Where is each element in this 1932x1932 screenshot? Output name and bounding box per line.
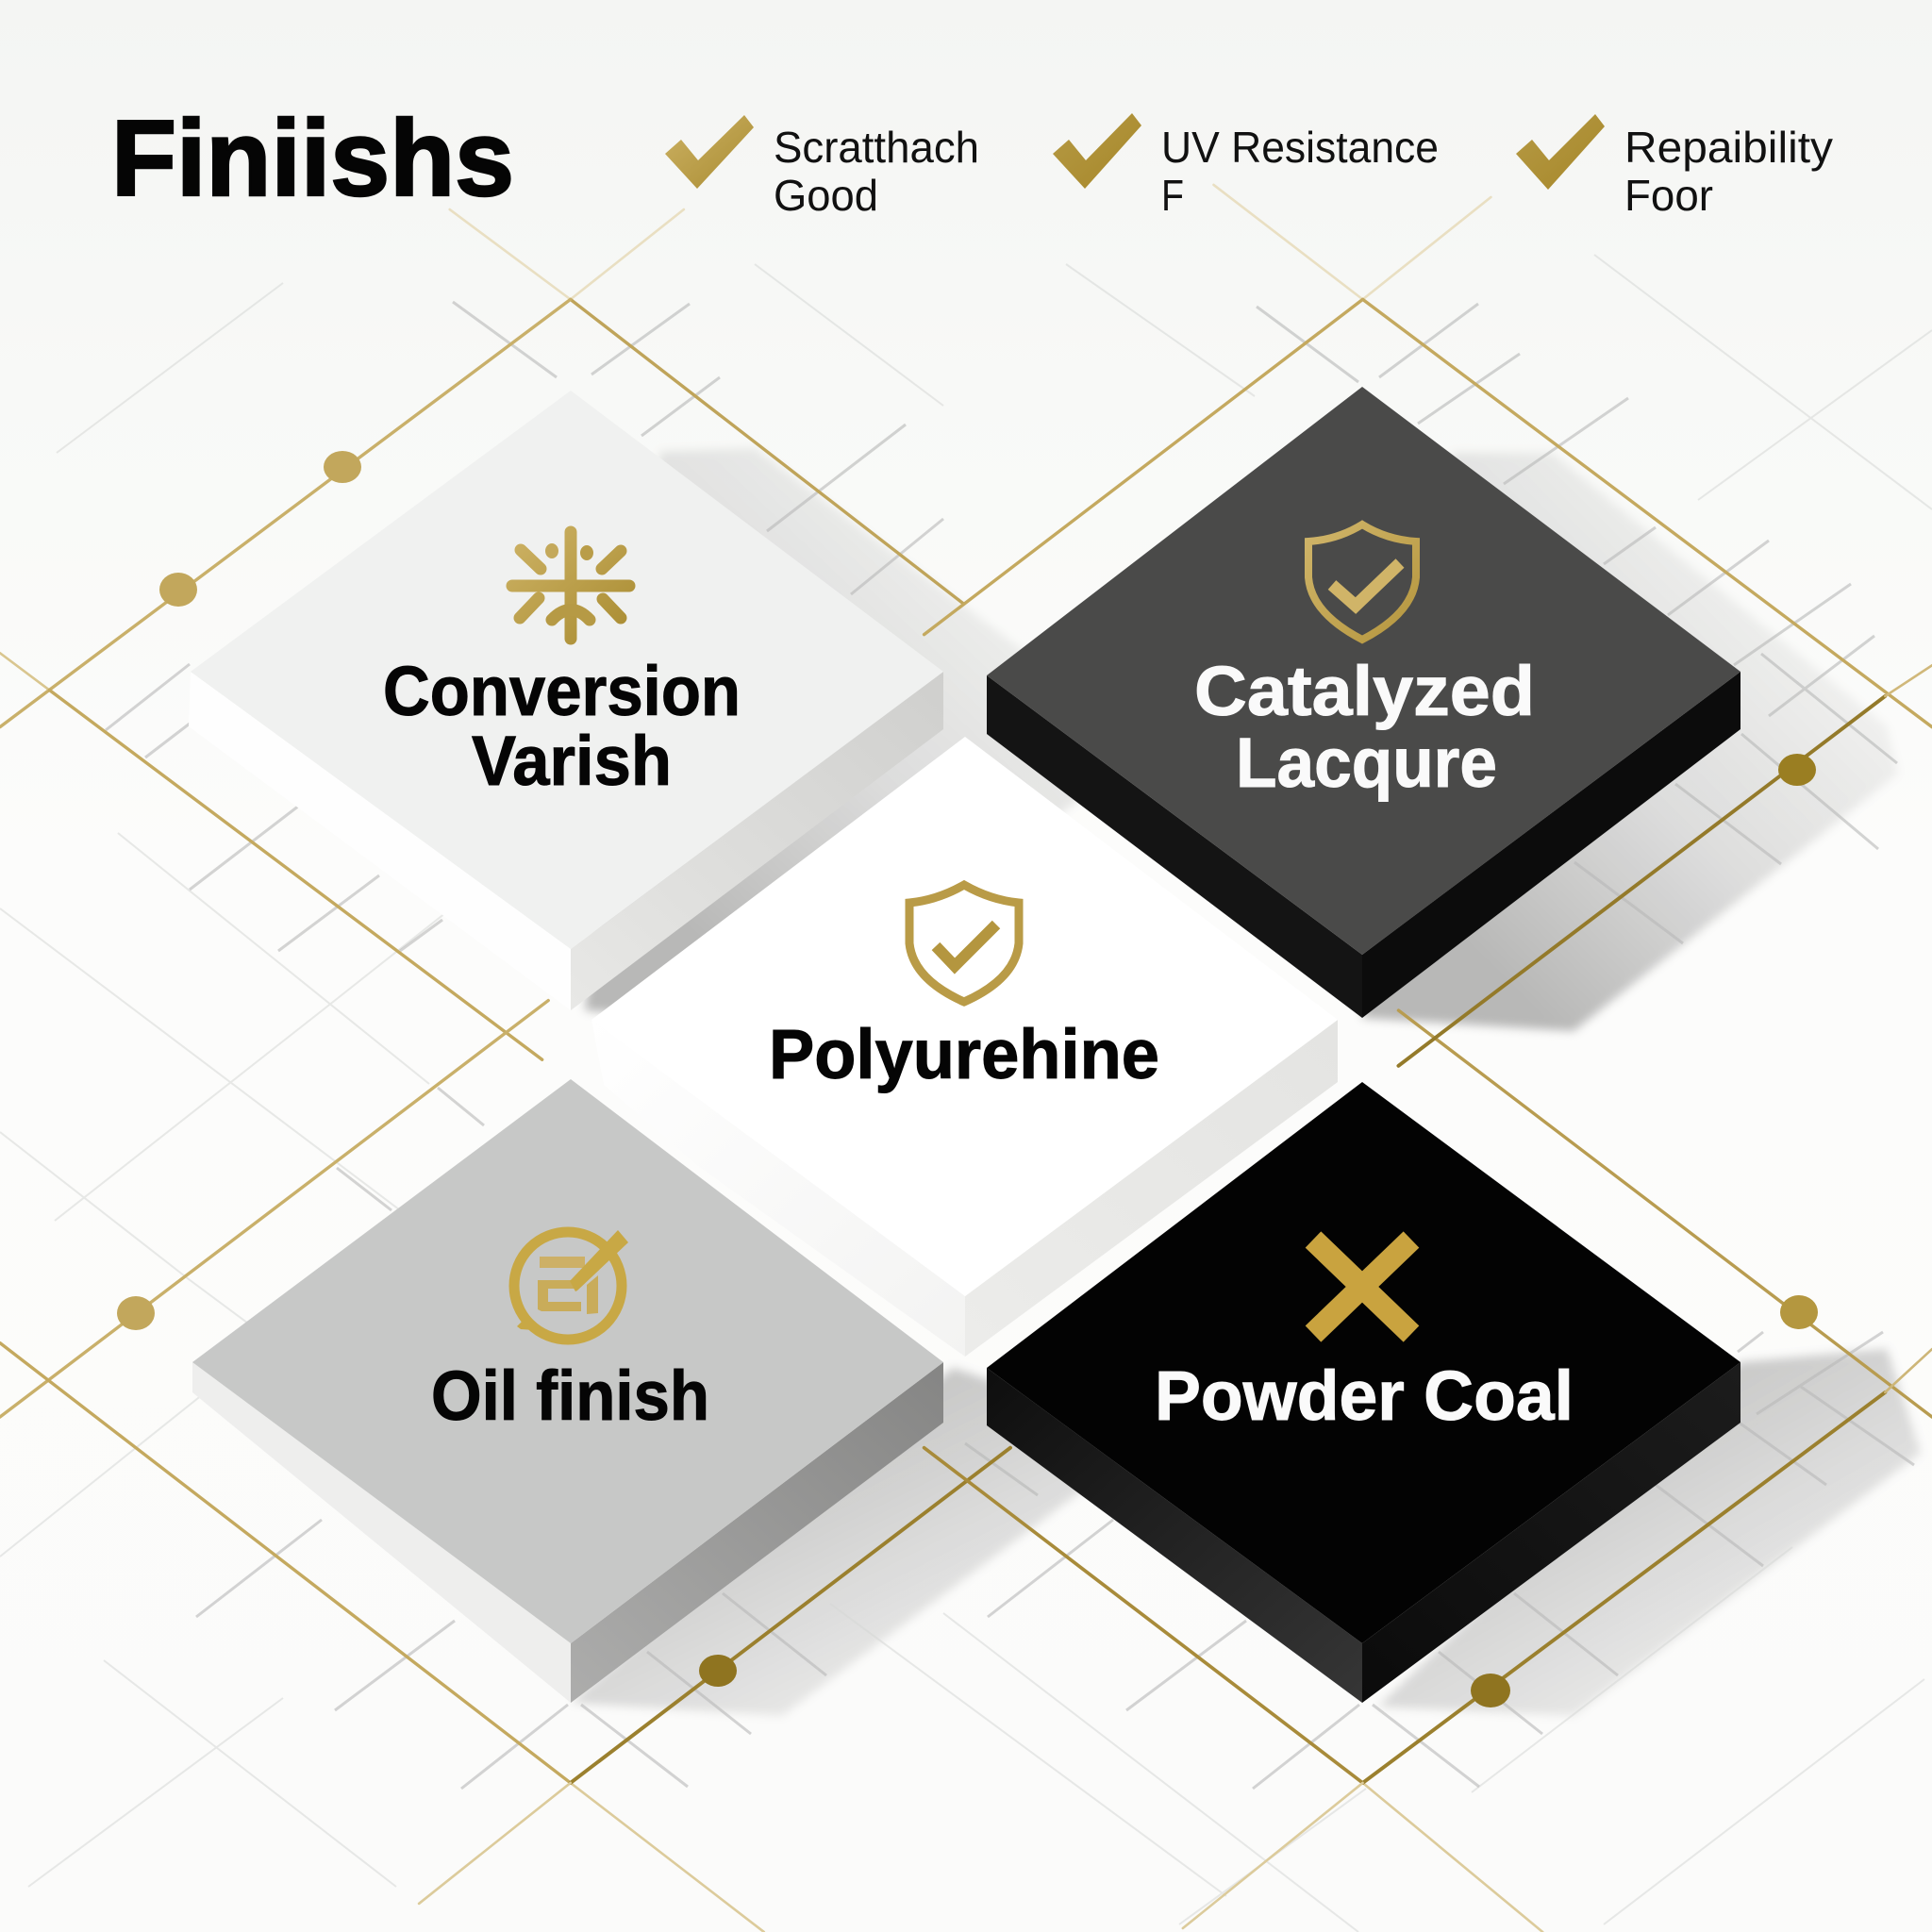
tile right side <box>965 1020 1338 1357</box>
tile right side <box>571 672 943 1010</box>
shadows beneath the tiles <box>571 448 1921 1716</box>
icon: check <box>665 115 754 189</box>
tile right side <box>1362 1362 1740 1703</box>
connector dots <box>117 451 1818 1707</box>
tile top face <box>987 387 1740 955</box>
tile: Catalyzed Lacquer <box>987 387 1740 1018</box>
tile: Polyurethane <box>591 737 1338 1357</box>
title: Finiishs <box>111 99 514 219</box>
text: UV Resistance F: UV Resistance <box>1161 123 1439 172</box>
text: Scratthach Good: Good <box>774 171 878 220</box>
icon: check <box>1053 113 1141 189</box>
tile: Powder Coat <box>987 1082 1740 1703</box>
tile: Conversion Varnish <box>189 391 943 1010</box>
label: Conversion Varish: Varish <box>472 722 672 800</box>
tile right side <box>1362 672 1740 1018</box>
text: Scratthach Good <box>774 123 979 220</box>
tile top face <box>591 737 1338 1296</box>
text: Scratthach Good: Scratthach <box>774 123 979 172</box>
icon: cross <box>1313 1240 1411 1334</box>
icon: check <box>1516 114 1605 190</box>
header item: scratch <box>665 115 979 220</box>
tile right side <box>571 1362 943 1703</box>
label: Catalyzed Lacqure <box>1194 652 1535 802</box>
tile top face <box>987 1082 1740 1643</box>
tile left side <box>591 1020 965 1357</box>
label: Catalyzed Lacqure: Catalyzed <box>1194 652 1535 730</box>
icon: circle with pencil <box>514 1230 628 1340</box>
tile: Oil finish <box>192 1079 943 1703</box>
label: Conversion Varish <box>383 652 741 800</box>
tile left side <box>987 1368 1362 1703</box>
tile top face <box>191 391 943 949</box>
label: Oil finish: Oil finish <box>431 1357 709 1435</box>
tile top face <box>192 1079 943 1643</box>
icon: snowflake <box>512 532 629 639</box>
tile left side <box>192 1362 571 1703</box>
label: Conversion Varish: Conversion <box>383 652 741 730</box>
text: UV Resistance F: F <box>1161 171 1184 220</box>
label: Powder Coal: Powder Coal <box>1155 1357 1574 1435</box>
icon: shield with check <box>1308 525 1416 640</box>
text: Repaibility Foor: Repaibility <box>1624 123 1833 172</box>
text: UV Resistance F <box>1161 123 1439 220</box>
text: Repaibility Foor: Foor <box>1624 171 1713 220</box>
icon: shield with check <box>909 885 1019 1002</box>
tile left side <box>987 675 1362 1018</box>
label: Polyurehine: Polyurehine <box>769 1015 1159 1093</box>
text: Repaibility Foor <box>1624 123 1833 220</box>
background lattice: grey lines <box>106 302 1914 1789</box>
header item: UV resistance <box>1053 113 1439 220</box>
header item: repairability <box>1516 114 1833 220</box>
label: Catalyzed Lacqure: Lacqure <box>1236 724 1497 802</box>
tile left side <box>189 672 571 1010</box>
